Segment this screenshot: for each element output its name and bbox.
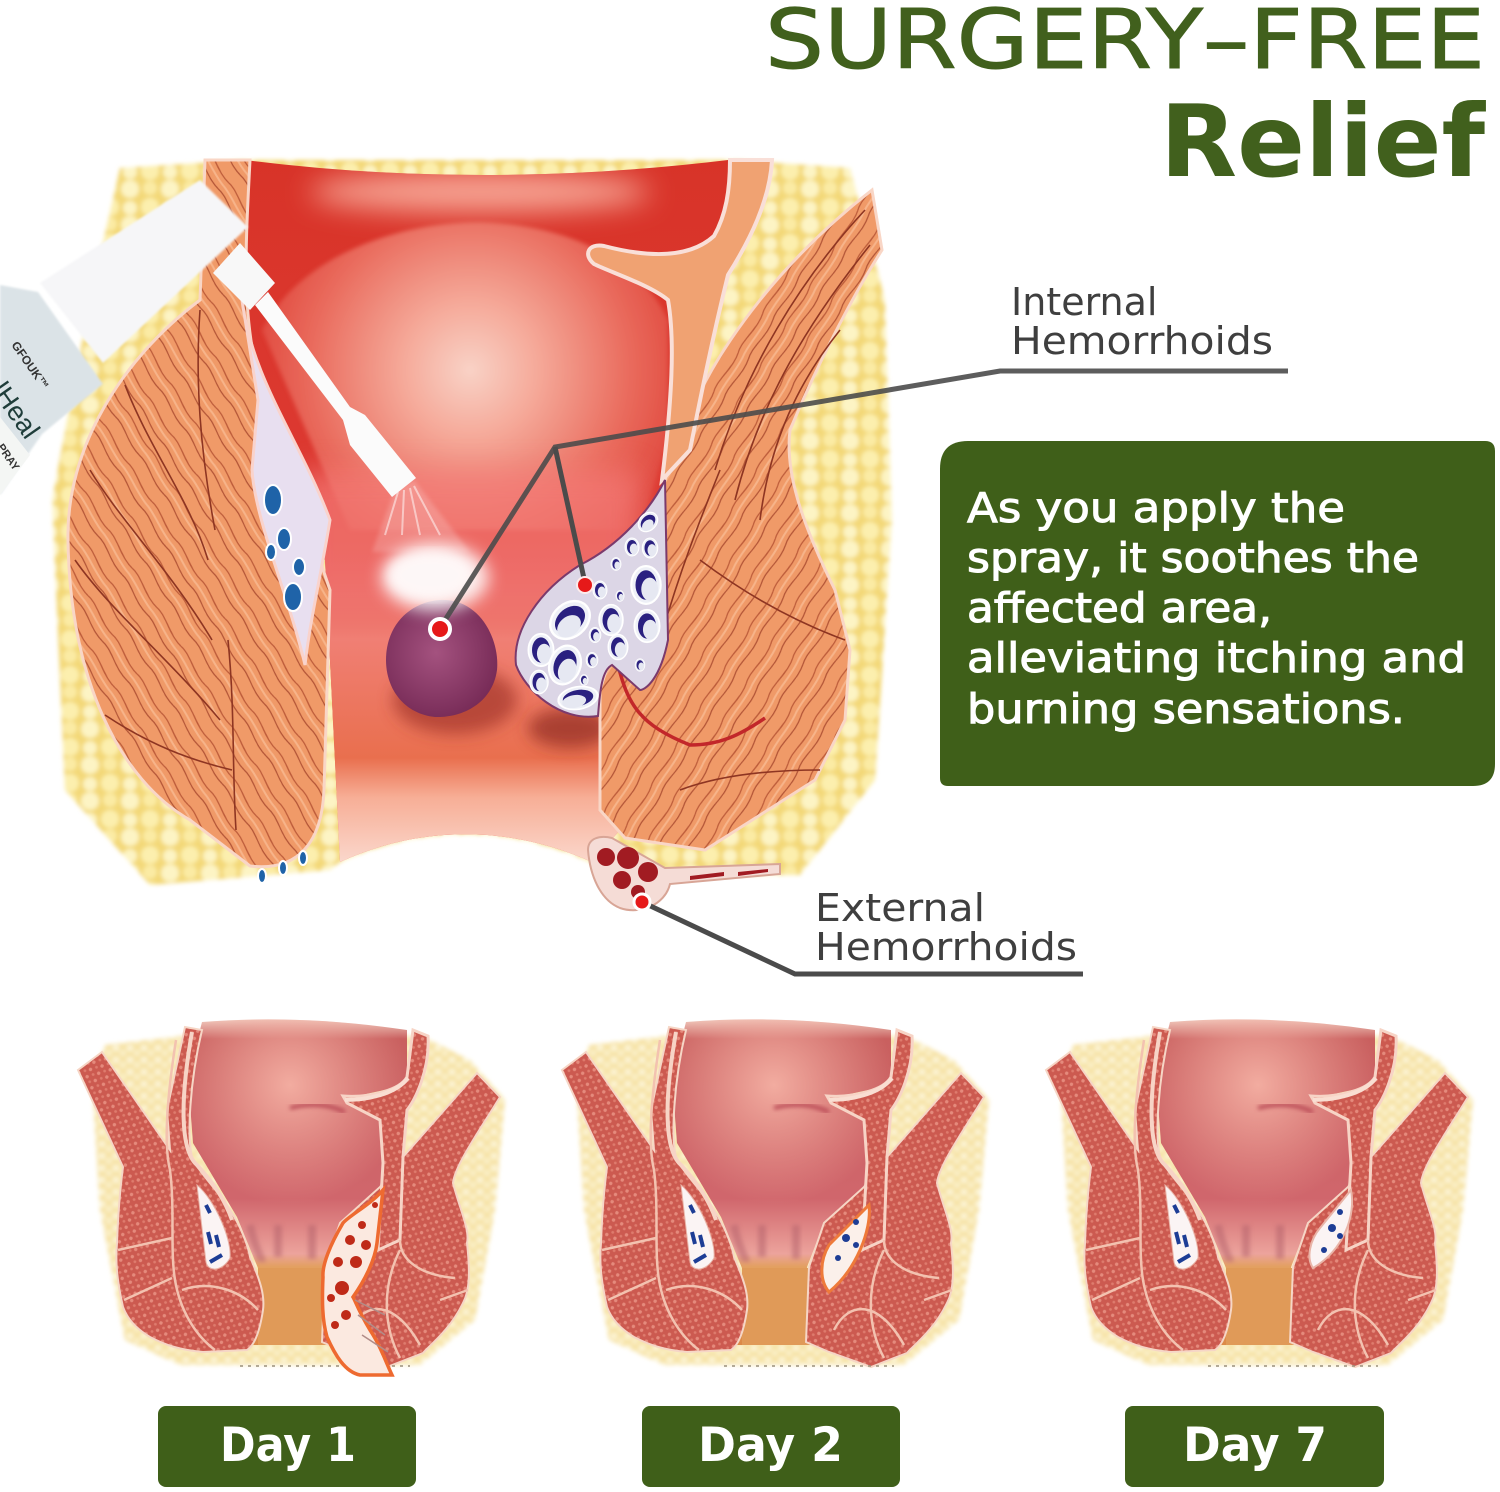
label: internal hemorrhoids	[1011, 280, 1273, 363]
callout box: alleviating itching and	[967, 634, 1466, 682]
rectal cavity	[240, 150, 740, 870]
label: internal hemorrhoids: Internal	[1011, 280, 1157, 324]
callout lines	[440, 371, 1288, 974]
label: external hemorrhoids: Hemorrhoids	[815, 925, 1077, 969]
red vessel line	[618, 665, 765, 745]
day 7 illustration	[1046, 1019, 1473, 1367]
vein cluster	[516, 480, 668, 717]
left veins	[258, 485, 307, 883]
callout box: affected area,	[967, 584, 1272, 632]
day 1 badge: Day 1	[220, 1418, 356, 1473]
callout box: burning sensations.	[967, 685, 1405, 733]
main anatomy illustration	[52, 150, 892, 910]
day 2 illustration	[562, 1019, 989, 1367]
internal hemorrhoid ball	[386, 600, 497, 717]
callout box: As you apply the	[967, 484, 1345, 532]
day 7 badge: Day 7	[1183, 1418, 1327, 1473]
label: external hemorrhoids	[815, 886, 1077, 969]
callout box	[940, 441, 1495, 786]
right muscle wall	[600, 190, 882, 850]
title: Relief	[1160, 83, 1486, 200]
day 1 badge	[158, 1406, 416, 1487]
title	[765, 0, 1486, 200]
right top fold	[588, 160, 772, 480]
day 2 badge: Day 2	[698, 1418, 843, 1473]
bottle label text: GFOUK™	[9, 339, 52, 392]
nozzle head	[213, 243, 275, 310]
nozzle collar	[40, 180, 248, 363]
label: internal hemorrhoids: Hemorrhoids	[1011, 319, 1273, 363]
day 7 badge	[1125, 1406, 1384, 1487]
left muscle wall	[68, 160, 330, 867]
callout box: spray, it soothes the	[967, 534, 1419, 582]
label: external hemorrhoids: External	[815, 886, 985, 930]
callout markers	[430, 577, 650, 910]
day 1 illustration	[78, 1019, 505, 1375]
internal hemorrhoid shadow	[393, 666, 517, 734]
spray mist and cloud	[372, 480, 489, 611]
day 2 badge	[642, 1406, 900, 1487]
bottle body	[0, 285, 103, 495]
left vein band	[242, 300, 330, 665]
fat tissue	[52, 160, 892, 885]
applicator tube	[255, 292, 416, 497]
spray bottle	[0, 180, 416, 497]
cluster shadow	[528, 708, 612, 748]
external hemorrhoid	[588, 837, 780, 910]
